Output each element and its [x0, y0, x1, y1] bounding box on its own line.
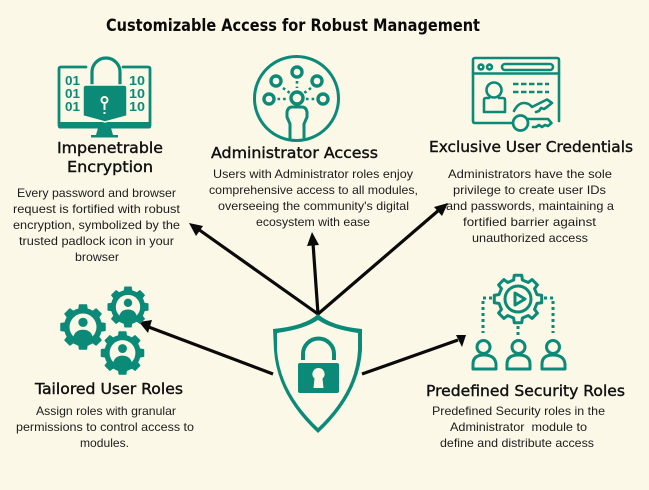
text: credentials description: unauthorized access	[472, 231, 588, 245]
text: administrator description: ecosystem with ease	[256, 215, 370, 229]
arrow: shield to administrator	[307, 232, 319, 314]
text: user roles description: modules.	[80, 436, 129, 450]
text: administrator description	[209, 167, 418, 229]
heading: Administrator Access: Administrator Access	[211, 144, 378, 162]
text: encryption description: browser	[75, 250, 119, 264]
text: user roles description	[16, 404, 194, 450]
text: credentials description: Administrators have the sole	[448, 167, 612, 181]
text: security roles description: Administrator module to	[450, 420, 587, 434]
icon: encryption padlock on monitor: 10	[129, 100, 145, 114]
text: administrator description: comprehensive access to all modules,	[209, 183, 418, 197]
heading: Exclusive User Credentials: Exclusive User Credentials	[429, 138, 633, 156]
text: administrator description: Users with Administrator roles enjoy	[213, 167, 413, 181]
arrow: shield to user roles	[139, 320, 273, 374]
icon: central shield with padlock	[273, 314, 362, 433]
heading: Impenetrable Encryption: Impenetrable	[57, 139, 163, 157]
icon: user role gears	[61, 287, 148, 374]
heading: Tailored User Roles: Tailored User Roles	[34, 380, 183, 398]
text: credentials description	[446, 167, 614, 245]
text: encryption description: trusted padlock icon in your	[19, 234, 174, 248]
icon: encryption padlock on monitor: 01	[65, 87, 80, 101]
icon: encryption padlock on monitor: 10	[129, 74, 145, 88]
text: encryption description: request is fortified with robust	[13, 202, 181, 216]
text: security roles description	[432, 404, 605, 450]
text: user roles description: Assign roles with granular	[36, 404, 176, 418]
title: Customizable Access for Robust Management	[106, 16, 480, 36]
icon: encryption padlock on monitor: 01	[65, 100, 80, 114]
text: credentials description: privilege to create user IDs	[453, 183, 606, 197]
icon: encryption padlock on monitor: 10	[129, 87, 145, 101]
text: encryption description	[13, 186, 181, 264]
text: credentials description: and passwords, maintaining a	[446, 199, 614, 213]
text: security roles description: Predefined Security roles in the	[432, 404, 605, 418]
text: user roles description: permissions to control access to	[16, 420, 194, 434]
arrow: shield to credentials	[318, 203, 448, 314]
text: administrator description: overseeing the community's digital	[218, 199, 409, 213]
icon: administrator network	[254, 56, 338, 140]
icon: predefined roles gear and users	[473, 275, 565, 369]
icon: encryption padlock on monitor: 01	[65, 74, 80, 88]
icon: user credentials window with keys	[473, 58, 559, 130]
arrow: shield to security roles	[362, 335, 466, 374]
text: credentials description: fortified barrier against	[463, 215, 597, 229]
heading: Predefined Security Roles: Predefined Security Roles	[426, 382, 625, 400]
heading: Impenetrable Encryption	[57, 139, 163, 176]
text: encryption description: encryption, symbolized by the	[13, 218, 180, 232]
arrow: shield to encryption	[189, 223, 318, 314]
icon: encryption padlock on monitor	[58, 58, 151, 138]
heading: Impenetrable Encryption: Encryption	[67, 158, 153, 176]
text: security roles description: define and distribute access	[440, 436, 594, 450]
text: encryption description: Every password and browser	[17, 186, 176, 200]
